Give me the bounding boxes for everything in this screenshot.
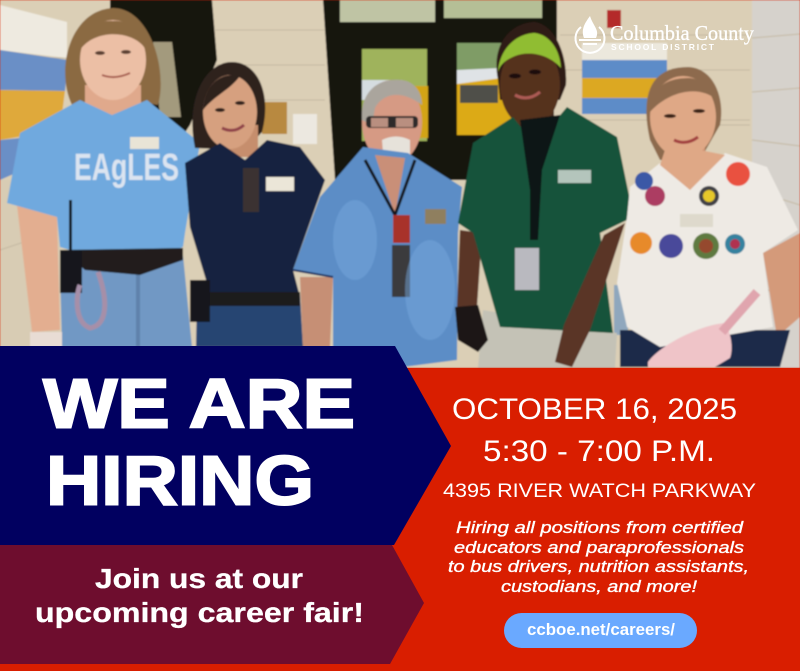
wall poster and alarm on right (262, 10, 667, 144)
person 3: man with beard and blue polo (293, 80, 462, 367)
logo name: Columbia County (610, 21, 754, 45)
event date: OCTOBER 16, 2025 (452, 393, 737, 426)
logo: Columbia County School District (575, 16, 754, 53)
heading: we are: WE ARE (43, 364, 355, 442)
person 1: young man in blue Eagles shirt: EAgLES (74, 147, 179, 189)
person 1: young man in blue Eagles shirt (7, 8, 200, 347)
event time: 5:30 - 7:00 P.M. (483, 435, 715, 468)
positions description (448, 519, 749, 596)
photo: five staff members standing in a school hallway (0, 0, 800, 368)
invitation line 2: upcoming career fair! (35, 597, 364, 628)
person 2: woman in navy shirt (185, 62, 325, 347)
icon: torch flame in circle (575, 16, 604, 53)
embroidered flowers (630, 162, 750, 259)
careers link button: ccboe.net/careers/ (527, 621, 675, 639)
positions description: Hiring all positions from certified (456, 519, 744, 537)
navy arrow banner: we are hiring (0, 346, 451, 545)
careers link button (504, 613, 697, 648)
person 5: woman in embroidered white blouse with pink bag (617, 67, 800, 367)
wall signs on left (0, 5, 68, 180)
positions description: custodians, and more! (501, 578, 697, 596)
positions description: educators and paraprofessionals (454, 539, 744, 557)
hallway background (0, 0, 800, 368)
logo subtitle: SCHOOL DISTRICT (611, 42, 715, 52)
maroon arrow banner: career fair invitation (0, 545, 424, 664)
positions description: to bus drivers, nutrition assistants, (448, 558, 749, 576)
heading: hiring: HIRING (46, 442, 314, 520)
person 4: woman in green polo with headband (455, 22, 630, 368)
invitation line 1: Join us at our (95, 563, 303, 594)
event address: 4395 RIVER WATCH PARKWAY (443, 480, 756, 502)
red background panel (0, 368, 800, 671)
